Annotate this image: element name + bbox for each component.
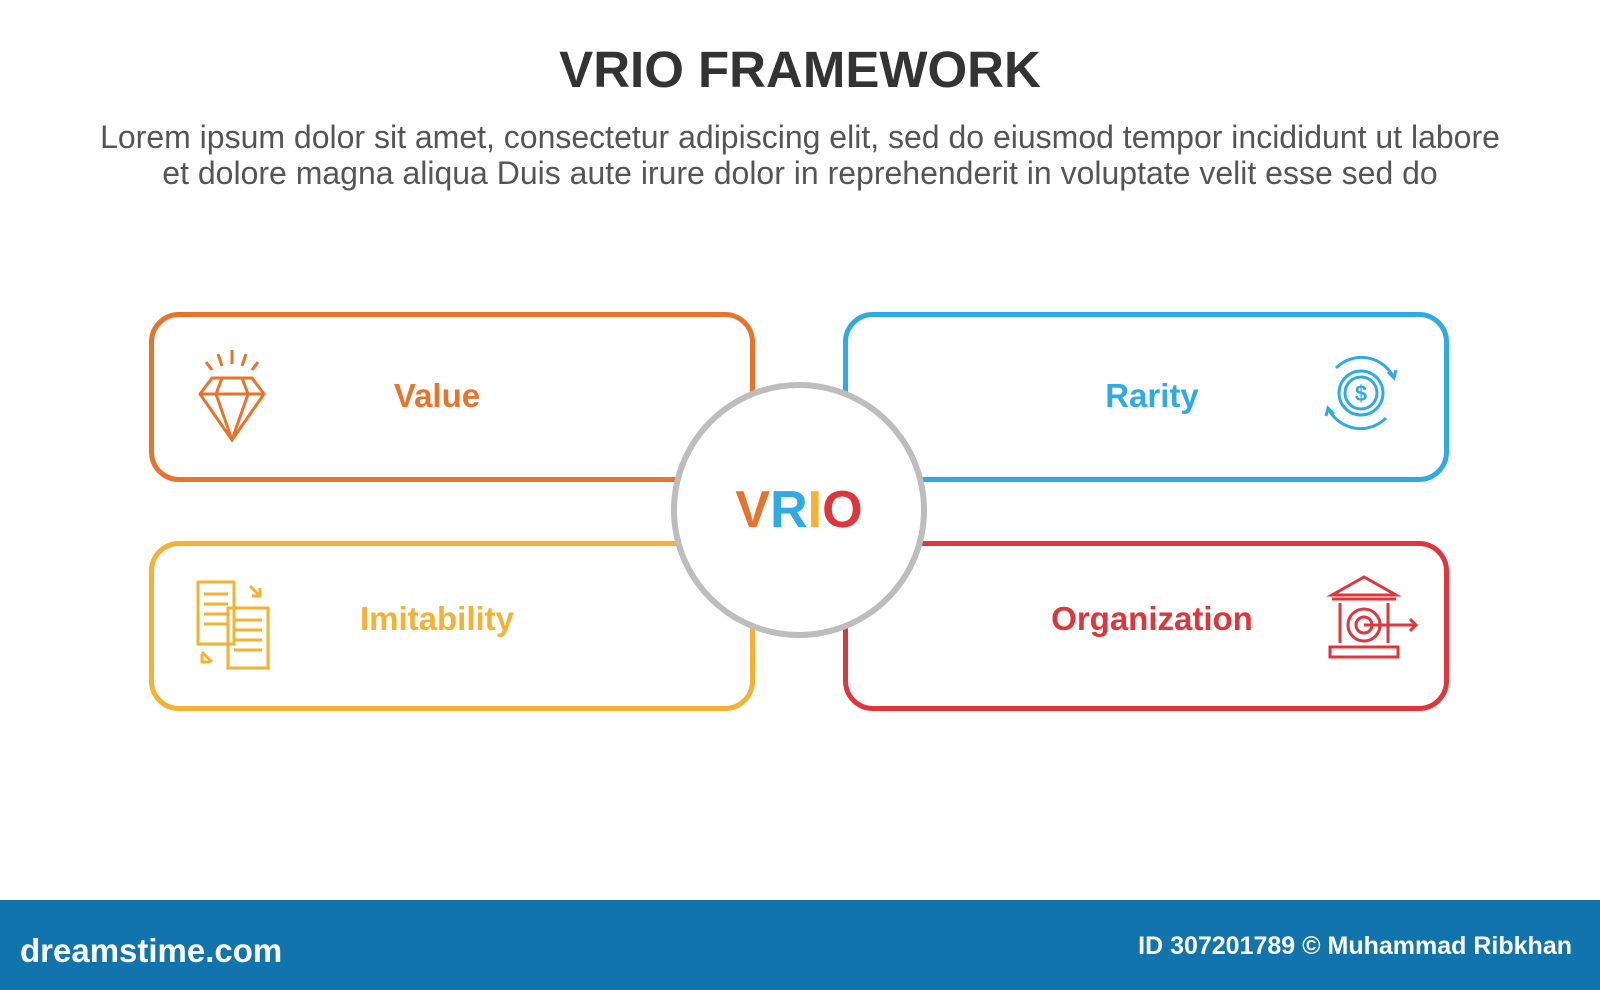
center circle: R (770, 481, 808, 539)
label: rarity: Rarity (1105, 377, 1199, 414)
subtitle: Lorem ipsum dolor sit amet, consectetur adipiscing elit, sed do eiusmod tempor incididunt ut labore (100, 119, 1500, 155)
footer credit: ID 307201789 © Muhammad Ribkhan (1138, 932, 1572, 960)
footer bar (0, 900, 1600, 990)
icon: diamond (198, 350, 266, 442)
label: organization: Organization (1051, 600, 1253, 637)
icon: dollar cycle: $ (1355, 381, 1367, 406)
center circle: V (735, 481, 770, 539)
label: imitability: Imitability (360, 600, 514, 637)
center circle: O (822, 481, 863, 539)
panel: imitability (149, 541, 755, 711)
icon: dollar cycle (1324, 356, 1398, 430)
footer logo text: dreamstime.com (20, 932, 282, 969)
panel: value (149, 312, 755, 482)
center circle: I (808, 481, 822, 539)
subtitle: et dolore magna aliqua Duis aute irure dolor in reprehenderit in voluptate velit esse sed do (162, 155, 1438, 191)
panel: rarity (843, 312, 1449, 482)
label: value: Value (394, 377, 480, 414)
panel: organization (843, 541, 1449, 711)
icon: bank target (1326, 575, 1418, 658)
subtitle (100, 119, 1500, 191)
title: VRIO FRAMEWORK (559, 41, 1041, 98)
center circle (671, 382, 927, 638)
icon: documents (196, 580, 270, 670)
